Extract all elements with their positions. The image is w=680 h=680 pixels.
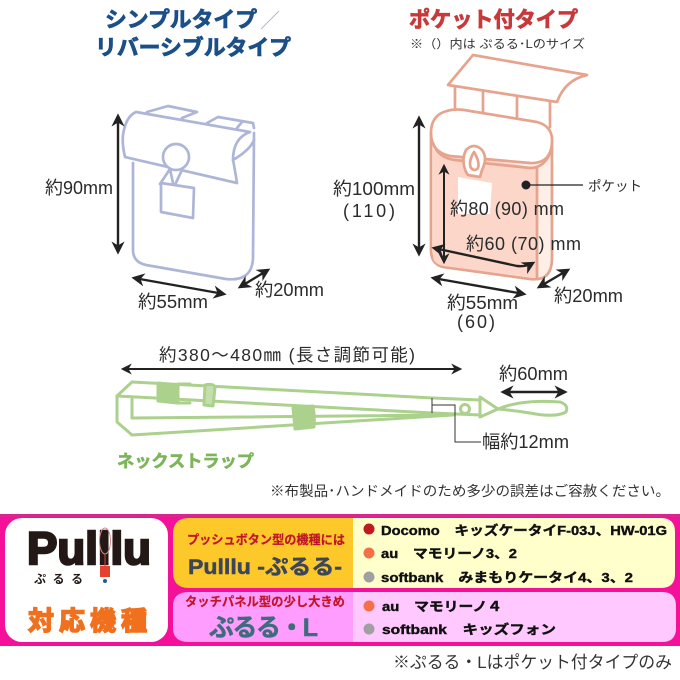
panel: touch panel models: softbank キッズフォン	[382, 622, 556, 637]
dimensions: simple bag	[45, 116, 324, 312]
dimensions: strap: 約60mm	[499, 364, 568, 384]
dimensions: pocket bag: 約55mm	[447, 293, 518, 313]
dimensions: simple bag: 約20mm	[255, 280, 324, 300]
footnote: ※ぷるる・Lはポケット付タイプのみ	[393, 653, 672, 672]
dimensions: pocket bag: 約60 (70) mm	[466, 234, 581, 254]
panel: logo: 対応機種	[28, 606, 147, 636]
panel: push button models: au マモリーノ3、2	[381, 546, 517, 561]
panel: logo	[5, 518, 168, 642]
strap width leader	[432, 398, 481, 442]
dimensions: simple bag: 約90mm	[45, 178, 113, 198]
note: handmade tolerance: ※布製品･ハンドメイドのため多少の誤差はご容赦ください。	[270, 483, 670, 499]
dimensions: pocket bag: 約20mm	[554, 286, 623, 306]
panel: push button models: softbank みまもりケータイ4、3、2	[381, 570, 633, 585]
dimensions: pocket bag: (60)	[457, 312, 495, 332]
dimensions: simple bag: 約55mm	[138, 292, 208, 312]
label: neck strap: ネックストラップ	[117, 452, 254, 471]
callout: pocket: ポケット	[588, 178, 642, 194]
dimensions: strap	[123, 345, 569, 452]
panel: touch panel models: au マモリーノ４	[382, 599, 502, 614]
title: simple / reversible type: リバーシブルタイプ	[95, 35, 292, 60]
title: simple / reversible type	[95, 8, 292, 60]
callout: pocket	[522, 178, 642, 194]
title: pocket type: ポケット付タイプ	[409, 8, 578, 32]
panel: push button models: Docomo キッズケータイF-03J、HW-01G	[381, 523, 667, 538]
panel: compatible models	[0, 514, 680, 646]
panel: logo: Pulllu	[27, 523, 151, 574]
illustration: pocket bag	[431, 55, 587, 279]
dimensions: strap: 約380〜480㎜ (長さ調節可能)	[159, 345, 415, 365]
panel: touch panel models: タッチパネル型の少し大きめ	[185, 594, 345, 609]
panel: push button models: プッシュボタン型の機種には	[187, 532, 345, 547]
dimensions: pocket bag: (110)	[343, 201, 395, 221]
note: size in brackets: ※（）内は ぷるる･Lのサイズ	[410, 36, 585, 51]
panel: push button models	[173, 518, 675, 588]
panel: push button models: Pulllu -ぷるる-	[188, 556, 342, 579]
illustration: simple bag	[123, 106, 254, 279]
panel: touch panel models	[173, 592, 676, 642]
dimensions: pocket bag: 約80 (90) mm	[450, 199, 564, 219]
panel: touch panel models: ぷるる・L	[209, 614, 318, 642]
panel: logo: ぷるる	[34, 572, 83, 586]
title: simple / reversible type: シンプルタイプ	[105, 8, 258, 32]
illustration: neck strap	[117, 382, 567, 435]
dimensions: strap: 幅約12mm	[482, 432, 569, 452]
dimensions: pocket bag: 約100mm	[333, 179, 415, 199]
dimensions: pocket bag	[333, 118, 623, 332]
